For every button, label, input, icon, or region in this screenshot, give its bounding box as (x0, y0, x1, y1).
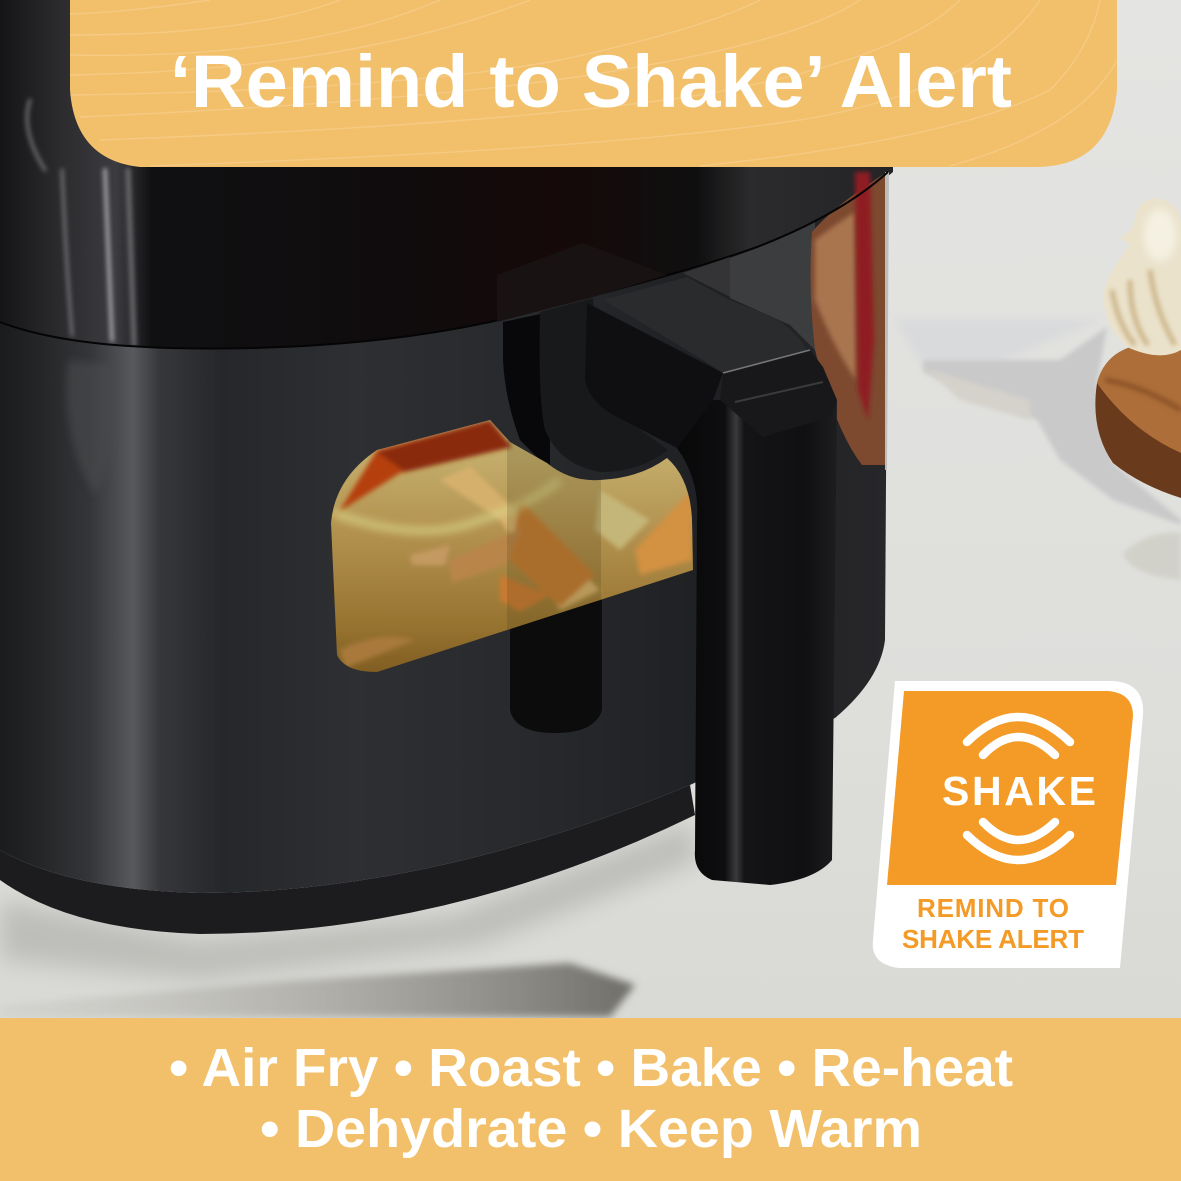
darker rear bar through window (507, 440, 601, 640)
grey panel beside handle (730, 222, 815, 350)
light arc over window (331, 480, 560, 531)
handle end cap (720, 350, 837, 437)
shake alert badge (873, 681, 1143, 968)
banner heading: ‘Remind to Shake’ Alert (170, 40, 1012, 123)
banner contour lines (70, 0, 1117, 166)
feature list line 2: • Dehydrate • Keep Warm (260, 1099, 922, 1159)
viewing window with food (325, 415, 700, 680)
shake label: SHAKE (942, 768, 1096, 814)
feature list line 1: • Air Fry • Roast • Bake • Re-heat (169, 1038, 1013, 1098)
basket body (0, 172, 888, 893)
badge caption: REMIND TO (917, 893, 1069, 923)
icon: upper shake arcs (967, 717, 1070, 755)
kitchen reflection on basket (811, 172, 889, 470)
top banner (70, 0, 1117, 167)
handle arm top (603, 277, 807, 373)
icon: lower shake arcs (967, 822, 1070, 860)
basket foot (0, 785, 695, 934)
glossy streaks on upper housing (27, 100, 134, 345)
seam line (0, 172, 888, 348)
fryer upper housing (0, 0, 893, 348)
wooden board (1095, 343, 1181, 498)
curved body highlight (67, 360, 112, 495)
rear handle bar (510, 585, 602, 733)
badge caption (902, 893, 1084, 954)
handle pivot (540, 298, 668, 472)
garlic (1103, 198, 1181, 355)
badge caption: SHAKE ALERT (902, 924, 1084, 954)
handle mount (497, 243, 667, 322)
bottom banner (0, 1018, 1181, 1181)
air fryer (0, 0, 893, 934)
handle grip (677, 400, 837, 885)
handle arm side (585, 303, 723, 490)
